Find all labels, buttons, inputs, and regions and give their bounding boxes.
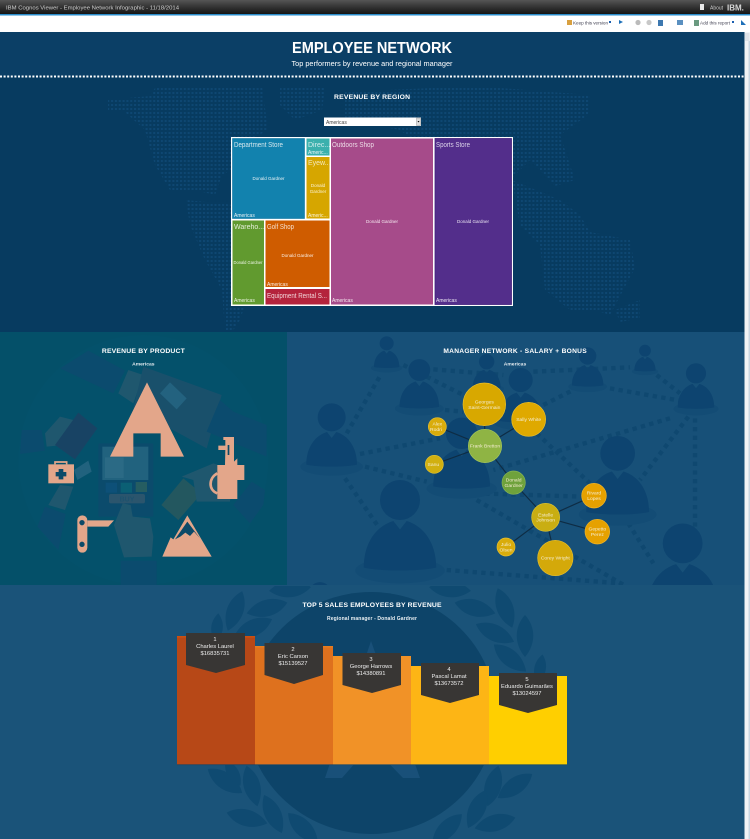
bar 2: Eric Carson <box>278 654 308 660</box>
cell: sports store: Americas <box>436 298 457 304</box>
cell: outdoors shop <box>331 138 433 304</box>
region dropdown <box>324 118 421 126</box>
cell: sports store: Sports Store <box>436 142 470 149</box>
background: laurel emblem <box>203 579 548 839</box>
toolbar: Add this report <box>700 20 731 26</box>
bar 1: $16835731 <box>200 651 230 657</box>
cell: warehouse: Wareho... <box>234 224 264 231</box>
node: Rivard Lopes: Rivard <box>587 491 601 497</box>
cell: outdoors shop: Donald Gardner <box>366 219 399 224</box>
bar 5 <box>489 673 567 765</box>
icon: golf bag <box>211 437 244 499</box>
header bar: IBM. <box>727 4 744 12</box>
node: Donald Gardner: Gardner <box>505 483 523 489</box>
node: Estelle Johnson: Estelle <box>538 512 553 518</box>
heading: manager network: MANAGER NETWORK - SALARY + BONUS <box>443 348 587 355</box>
cell: department store: Americas <box>234 213 255 219</box>
toolbar: Keep this version <box>573 20 608 26</box>
icon: camping tent <box>110 382 184 457</box>
scrollbar <box>744 32 750 839</box>
bar 3: 3 <box>369 657 373 663</box>
bar 5: 5 <box>525 677 529 683</box>
cell: outdoors shop: Americas <box>332 298 353 304</box>
bar 2 <box>255 643 333 765</box>
world map dots <box>108 86 640 332</box>
node: Rivard Lopes <box>582 483 606 508</box>
bar 1: Charles Laurel <box>196 644 234 650</box>
node: Julio Olsen: Olsen <box>499 547 513 553</box>
cell: eyewear: Eyew... <box>308 160 331 167</box>
cell: direct: Americ... <box>308 150 328 156</box>
background: people silhouettes <box>295 336 727 640</box>
node: Donald Gardner: Donald <box>506 478 522 484</box>
bar 4: 4 <box>447 667 451 673</box>
title band background <box>0 32 745 77</box>
cell: equipment rental: Equipment Rental S... <box>267 293 327 300</box>
bar 3 <box>333 653 411 765</box>
bar 5: Eduardo Guimarães <box>501 684 553 690</box>
node: Frank Bretton: Frank Bretton <box>470 444 500 450</box>
title: EMPLOYEE NETWORK <box>292 40 452 57</box>
node: Alex Rodri <box>428 418 446 436</box>
cell: sports store: Donald Gardner <box>457 219 490 224</box>
cell: eyewear <box>306 157 331 219</box>
bar 4: $13673572 <box>434 681 464 687</box>
cell: department store: Donald Gardner <box>252 176 285 181</box>
panel: revenue by region <box>108 88 640 330</box>
node: Estelle Johnson <box>532 503 560 531</box>
background illustration: hands and tablet: BUY <box>120 496 135 503</box>
node: Rivard Lopes: Lopes <box>587 496 601 502</box>
cell: eyewear: Americ... <box>308 213 328 219</box>
node: Georges Saint-Germain: Georges <box>475 399 494 405</box>
node: Gepetto Perez: Gepetto <box>588 527 606 533</box>
treemap <box>231 137 513 306</box>
cell: golf shop: Donald Gardner <box>281 253 314 258</box>
node: Sally White: Sally White <box>516 417 541 423</box>
bar 2: 2 <box>291 647 295 653</box>
dotted divider <box>0 76 745 78</box>
node: Estelle Johnson: Johnson <box>536 518 555 524</box>
panel: revenue by product <box>0 332 287 585</box>
network links <box>443 426 586 542</box>
bar 3: $14380891 <box>356 671 386 677</box>
node: Alex Rodri: Rodri <box>430 427 442 433</box>
node: Gepetto Perez: Perez <box>591 532 604 538</box>
node: Corey Wright <box>538 540 573 576</box>
node: Sanu: Sanu <box>428 462 439 468</box>
region label: product: Americas <box>132 362 155 368</box>
node: Sally White <box>512 402 546 436</box>
panel: top 5 sales employees <box>0 579 745 839</box>
network nodes <box>425 383 610 576</box>
heading: top 5: TOP 5 SALES EMPLOYEES BY REVENUE <box>302 602 442 609</box>
heading: revenue by product: REVENUE BY PRODUCT <box>102 348 186 355</box>
cell: direct: Direc... <box>308 142 330 149</box>
node: Donald Gardner <box>502 471 525 494</box>
toolbar <box>0 16 750 32</box>
header bar <box>0 0 750 16</box>
cell: equipment rental <box>266 289 330 304</box>
subtitle: Top performers by revenue and regional manager <box>292 59 453 68</box>
node: Georges Saint-Germain: Saint-Germain <box>468 405 501 411</box>
cell: outdoors shop: Outdoors Shop <box>332 142 374 149</box>
cell: department store <box>232 138 304 219</box>
bar 1 <box>177 633 255 765</box>
cell: warehouse: Americas <box>234 298 255 304</box>
heading: revenue by region: REVENUE BY REGION <box>334 94 410 101</box>
node: Frank Bretton <box>468 429 502 463</box>
node: Julio Olsen <box>497 538 515 556</box>
icon: mountain <box>162 515 212 557</box>
panel: manager network <box>287 332 744 585</box>
subheading: regional manager: Regional manager - Donald Gardner <box>327 616 417 622</box>
icon: first aid kit <box>48 462 74 483</box>
header bar: IBM Cognos Viewer - Employee Network Infographic - 11/18/2014 <box>6 6 180 12</box>
node: Gepetto Perez <box>585 519 610 544</box>
background illustration: hands and tablet <box>45 366 230 558</box>
cell: direct <box>306 138 330 156</box>
cell: eyewear: Gardner <box>310 189 327 194</box>
region dropdown: Americas <box>326 120 347 126</box>
cell: department store: Department Store <box>234 142 283 149</box>
cell: golf shop: Americas <box>267 282 288 288</box>
stepped bar chart <box>177 633 567 765</box>
bar 1: 1 <box>213 637 217 643</box>
cell: warehouse: Donald Gardner <box>234 260 263 265</box>
cell: sports store <box>435 138 512 304</box>
bar 4 <box>411 663 489 765</box>
node: Corey Wright: Corey Wright <box>541 556 570 562</box>
node: Julio Olsen: Julio <box>501 542 511 548</box>
bar 2: $15139527 <box>278 661 308 667</box>
node: Sanu <box>425 455 443 473</box>
header bar: About <box>710 6 724 12</box>
background: dashed network links <box>345 365 695 587</box>
icon: pocket knife <box>77 515 114 553</box>
cell: warehouse <box>232 220 264 304</box>
node: Alex Rodri: Alex <box>432 422 443 428</box>
bar 5: $13024597 <box>512 691 542 697</box>
cell: eyewear: Donald <box>311 183 326 188</box>
cell: golf shop: Golf Shop <box>267 224 294 231</box>
bar 4: Pascal Lamat <box>431 674 467 680</box>
cell: golf shop <box>266 220 330 288</box>
node: Georges Saint-Germain <box>463 383 506 426</box>
region label: network: Americas <box>504 362 526 368</box>
bar 3: George Harrows <box>350 664 392 670</box>
